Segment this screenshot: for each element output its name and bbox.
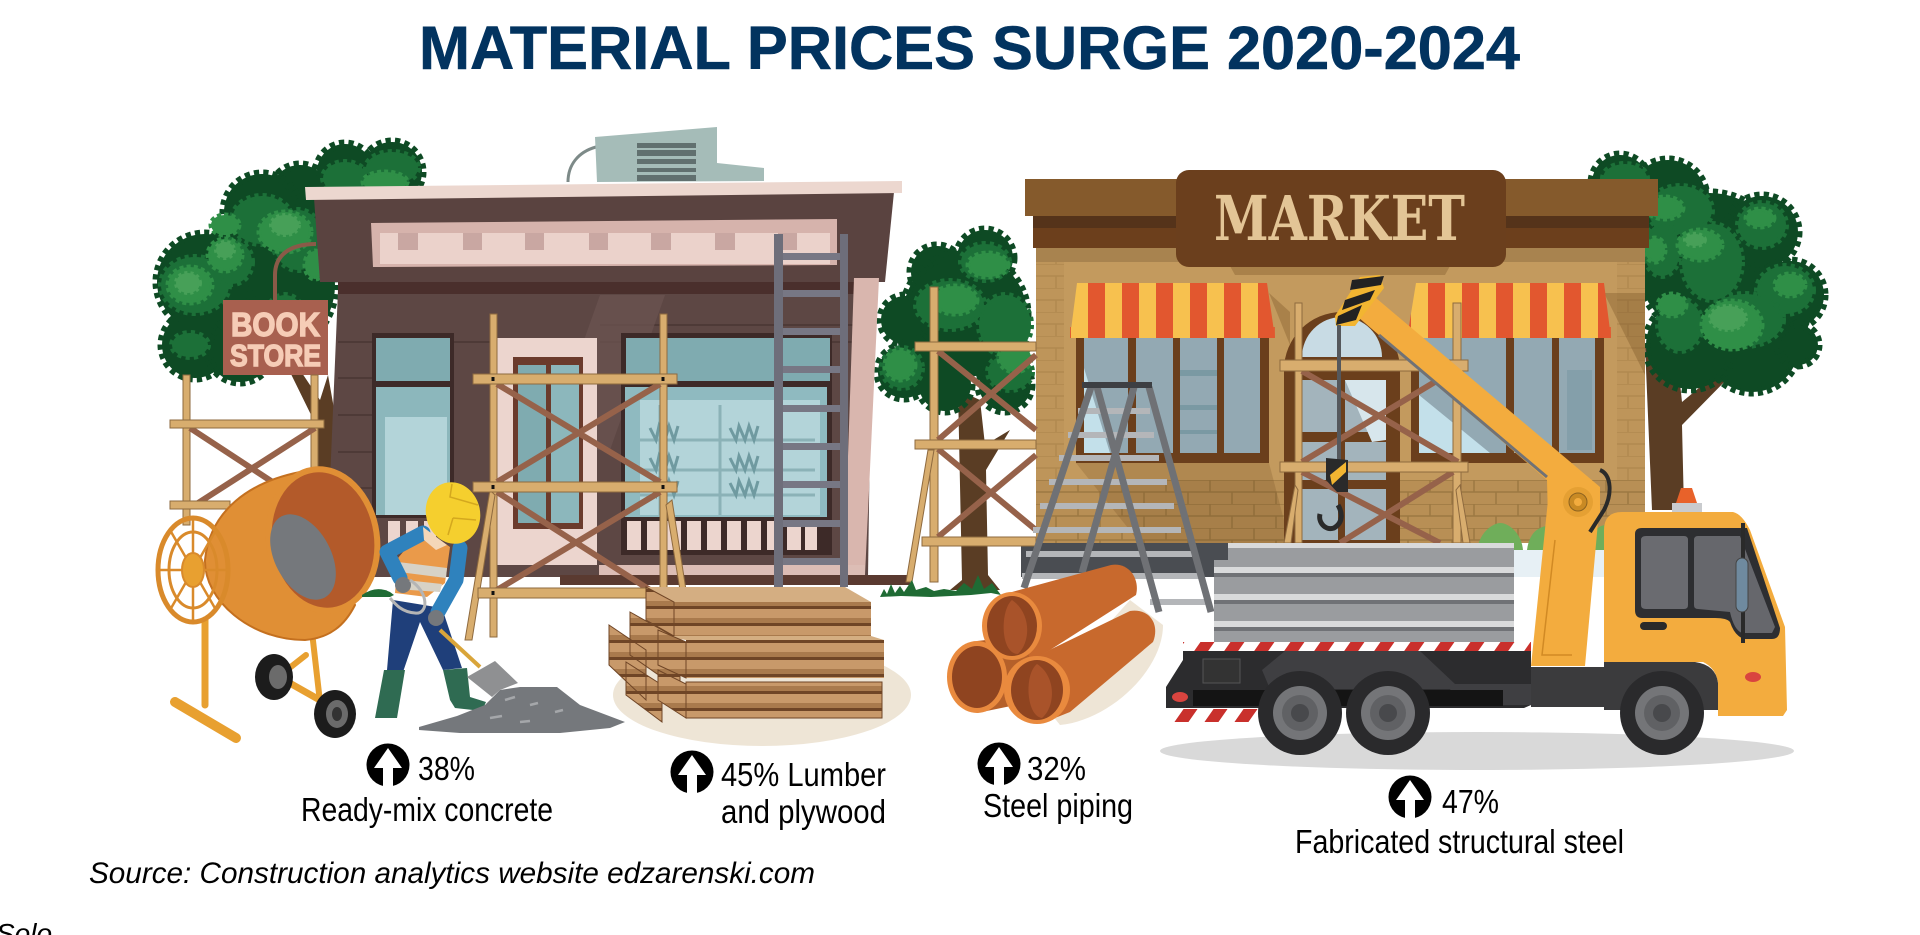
front wheel bbox=[1620, 671, 1704, 755]
side boards bbox=[609, 612, 680, 722]
base bbox=[560, 575, 910, 585]
market base bbox=[1021, 543, 1229, 577]
rear wheel 1 bbox=[1258, 671, 1342, 755]
source note: Source: Construction analytics website edzarenski.com bbox=[89, 857, 815, 890]
middle layer bbox=[660, 636, 884, 640]
shovel bbox=[440, 630, 518, 697]
market door bbox=[1284, 312, 1400, 543]
tree: right bbox=[1592, 155, 1824, 510]
right window bbox=[621, 333, 832, 555]
bushes bbox=[1477, 523, 1606, 550]
market building bbox=[1021, 170, 1658, 577]
icon: up arrow bbox=[366, 744, 410, 787]
truck shadow bbox=[1160, 732, 1794, 770]
beacon bbox=[1672, 488, 1702, 512]
market sign: MARKET bbox=[1214, 182, 1465, 255]
concrete pile bbox=[419, 687, 625, 733]
bottom layer bbox=[686, 682, 882, 718]
value: 47% bbox=[1442, 783, 1499, 820]
mixer wheel back bbox=[255, 654, 293, 700]
scaffold: middle bbox=[906, 287, 1036, 582]
drum body bbox=[205, 472, 355, 640]
scaffold: market door bbox=[1280, 303, 1470, 543]
rear wheel 2 bbox=[1346, 671, 1430, 755]
building wall bbox=[326, 290, 872, 577]
truck bed stripe bbox=[1183, 642, 1531, 651]
market wall bbox=[1036, 248, 1645, 543]
mirror bbox=[1741, 523, 1745, 643]
label: Fabricated structural steel bbox=[1295, 823, 1624, 860]
door bbox=[497, 338, 597, 565]
wheel arch bbox=[1604, 662, 1718, 710]
mixer wheel front bbox=[314, 690, 356, 738]
right shop window bbox=[1411, 338, 1604, 463]
value: 32% bbox=[1027, 750, 1086, 787]
market sign bbox=[1176, 170, 1506, 267]
cornice bbox=[1025, 179, 1658, 216]
helmet bbox=[419, 476, 487, 550]
ledge bbox=[599, 565, 865, 575]
concrete in drum bbox=[257, 503, 349, 611]
lumber stack bbox=[609, 587, 884, 722]
pilaster bbox=[844, 278, 879, 575]
value: 38% bbox=[418, 750, 475, 787]
stat: fabricated structural steel bbox=[1295, 776, 1624, 860]
face bbox=[423, 527, 447, 550]
stat: ready-mix concrete bbox=[301, 744, 553, 828]
awning: left bbox=[1070, 283, 1275, 338]
stat: lumber and plywood bbox=[670, 750, 886, 830]
grass bbox=[880, 575, 1001, 597]
cement mixer bbox=[158, 462, 386, 738]
icon: up arrow bbox=[978, 742, 1020, 786]
value and label: 45% Lumber bbox=[721, 756, 886, 793]
bottom right pipe bbox=[1004, 611, 1155, 724]
boots bbox=[375, 668, 486, 718]
scaffold: bookstore bbox=[465, 314, 686, 640]
gloves bbox=[395, 577, 444, 626]
pipe shadow bbox=[1040, 600, 1163, 725]
frieze bbox=[371, 219, 837, 267]
chassis bbox=[1166, 651, 1531, 708]
rear hatch bbox=[1165, 709, 1258, 722]
left window bbox=[372, 333, 454, 518]
scaffold: left bbox=[170, 375, 324, 525]
truck bbox=[1165, 275, 1787, 755]
jeans bbox=[387, 600, 462, 672]
awning: right bbox=[1407, 283, 1611, 338]
cab bbox=[1604, 488, 1787, 716]
upper fascia bbox=[314, 192, 894, 282]
sign: book store bbox=[223, 300, 328, 375]
tree: middle bbox=[878, 230, 1032, 590]
back pipe bbox=[947, 635, 1040, 713]
icon: up arrow bbox=[670, 750, 714, 794]
top layer bbox=[646, 587, 871, 602]
vest bbox=[395, 528, 450, 597]
cab window bbox=[1635, 528, 1780, 639]
arms bbox=[387, 533, 460, 612]
top pipe bbox=[982, 565, 1137, 660]
crane column bbox=[1531, 500, 1600, 666]
roof slab bbox=[305, 181, 902, 200]
stat: steel piping bbox=[978, 742, 1133, 824]
pipes bbox=[947, 565, 1163, 725]
air conditioning unit bbox=[568, 127, 764, 182]
cab lamp bbox=[1745, 672, 1761, 682]
steel beams bbox=[1214, 543, 1514, 642]
label: Steel piping bbox=[983, 787, 1133, 824]
label: Ready-mix concrete bbox=[301, 791, 553, 828]
grass patch bbox=[362, 589, 394, 597]
sign: book store: STORE bbox=[230, 338, 321, 373]
drum rim bbox=[260, 462, 386, 618]
door handle bbox=[1640, 622, 1667, 630]
icon: up arrow bbox=[1388, 776, 1432, 819]
sign bracket bbox=[275, 244, 316, 300]
tool handle bbox=[390, 580, 425, 613]
tree: left bbox=[157, 142, 422, 480]
left shop window bbox=[1076, 338, 1269, 463]
sign: book store: BOOK bbox=[231, 306, 320, 343]
title: MATERIAL PRICES SURGE 2020-2024 bbox=[419, 14, 1520, 82]
left railing bbox=[388, 521, 436, 545]
hand wheel bbox=[158, 518, 228, 622]
lumber shadow bbox=[613, 644, 911, 746]
worker bbox=[375, 476, 518, 718]
extension ladder bbox=[774, 234, 848, 587]
crane hook bbox=[1320, 275, 1384, 529]
label second line: and plywood bbox=[721, 793, 886, 830]
mixer stand bbox=[175, 620, 325, 738]
crane boom bbox=[1358, 298, 1600, 520]
step ladder bbox=[1022, 382, 1211, 612]
rear lamp bbox=[1172, 692, 1188, 702]
bookstore building bbox=[275, 127, 910, 585]
